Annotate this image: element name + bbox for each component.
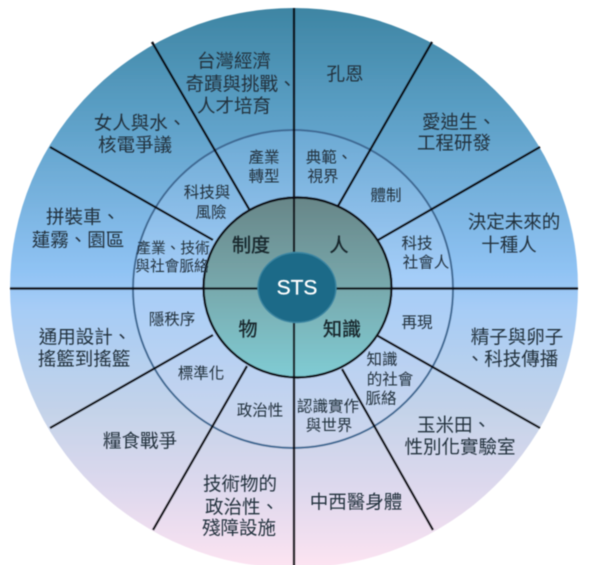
middle ring labels: 與社會脈絡 (135, 258, 209, 275)
middle ring labels: 與世界 (306, 416, 352, 434)
inner ring labels (232, 234, 361, 340)
outer ring labels: 人才培育 (197, 96, 271, 116)
outer ring labels: 、科技傳播 (466, 348, 558, 370)
outer ring labels: 拼裝車、 (46, 206, 120, 228)
middle ring labels: 視界 (307, 168, 339, 186)
middle ring labels: 產業、技術 (136, 240, 210, 257)
outer ring labels: 蓮霧、園區 (32, 230, 124, 250)
middle ring labels: 科技與 (184, 184, 230, 202)
outer ring labels: 糧食戰爭 (103, 430, 177, 452)
inner ring labels: 制度 (232, 234, 270, 256)
middle ring labels: 社會人 (403, 254, 449, 272)
middle ring labels: 隱秩序 (149, 310, 195, 328)
outer ring labels: 愛迪生、 (422, 112, 496, 132)
outer ring labels: 女人與水、 (94, 112, 186, 134)
outer ring labels: 台灣經濟 (197, 50, 271, 72)
middle ring labels: 風險 (195, 204, 227, 222)
outer ring labels: 性別化實驗室 (404, 436, 516, 458)
outer ring labels: 殘障設施 (202, 518, 276, 538)
centre circle (258, 252, 336, 322)
middle ring labels: 產業 (248, 148, 280, 166)
outer ring labels: 精子與卵子 (471, 326, 563, 348)
middle ring labels: 再現 (401, 314, 433, 332)
inner ring (204, 198, 392, 378)
middle ring labels (135, 148, 449, 434)
inner ring labels: 物 (238, 318, 258, 340)
middle ring labels: 體制 (370, 186, 402, 204)
outer ring labels: 核電爭議 (98, 134, 172, 156)
outer ring labels: 十種人 (481, 234, 537, 256)
outer ring labels: 孔恩 (326, 64, 364, 84)
outer ring labels: 技術物的 (203, 474, 277, 494)
outer ring labels: 玉米田、 (417, 414, 491, 436)
middle ring labels: 典範、 (306, 148, 352, 166)
middle ring labels: 脈絡 (365, 390, 397, 408)
middle ring labels: 科技 (401, 234, 433, 252)
inner ring dividers (203, 198, 392, 377)
middle ring labels: 轉型 (248, 168, 280, 186)
outer ring labels: 工程研發 (417, 132, 491, 154)
middle ring labels: 政治性 (237, 402, 283, 420)
outer ring labels: 政治性、 (205, 496, 279, 518)
inner ring labels: 人 (329, 234, 349, 256)
middle ring labels: 認識實作 (297, 396, 359, 416)
outer ring labels: 中西醫身體 (310, 492, 402, 512)
middle ring labels: 標準化 (178, 364, 224, 382)
outer ring labels: 決定未來的 (468, 212, 560, 232)
inner ring labels: 知識 (323, 318, 361, 340)
outer ring labels (32, 50, 563, 538)
middle ring labels: 知識 (366, 350, 398, 368)
middle ring (133, 130, 453, 448)
centre label STS: STS (277, 276, 317, 300)
middle ring labels: 的社會 (367, 370, 414, 388)
outer ring labels: 通用設計、 (39, 326, 131, 348)
outer ring labels: 搖籃到搖籃 (38, 348, 130, 370)
outer ring labels: 奇蹟與挑戰、 (185, 74, 297, 94)
